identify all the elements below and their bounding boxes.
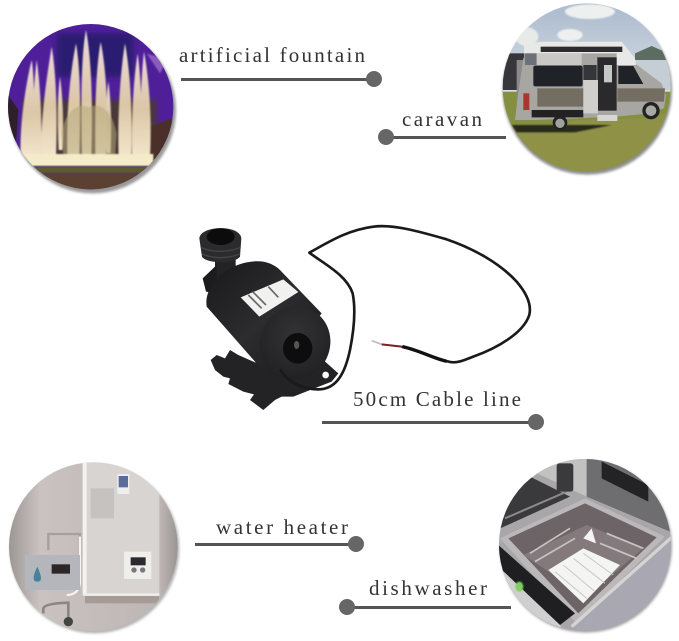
photo: caravan [501, 3, 674, 176]
label sticker [241, 279, 298, 317]
label: dishwasher [339, 576, 511, 615]
label: water heater: water heater [216, 515, 348, 539]
mounting base [211, 350, 338, 410]
label: 50cm cable line: 50cm Cable line [353, 387, 521, 411]
label: artificial fountain [179, 43, 382, 87]
label: water heater [195, 515, 364, 552]
label: caravan: caravan [402, 107, 482, 131]
threaded outlet [199, 228, 241, 262]
label: caravan [378, 107, 506, 145]
cylinder [206, 261, 322, 375]
caravan body [515, 42, 666, 120]
label: dishwasher: dishwasher [369, 576, 487, 600]
label: artificial fountain: artificial fountain [179, 43, 366, 67]
photo: dishwasher [498, 459, 674, 634]
pump neck [215, 253, 236, 282]
photo: water heater [8, 462, 181, 635]
photo: artificial fountain [8, 24, 178, 195]
product: pump with cable [199, 226, 530, 410]
cable [280, 226, 530, 389]
label: 50cm cable line [322, 387, 544, 430]
